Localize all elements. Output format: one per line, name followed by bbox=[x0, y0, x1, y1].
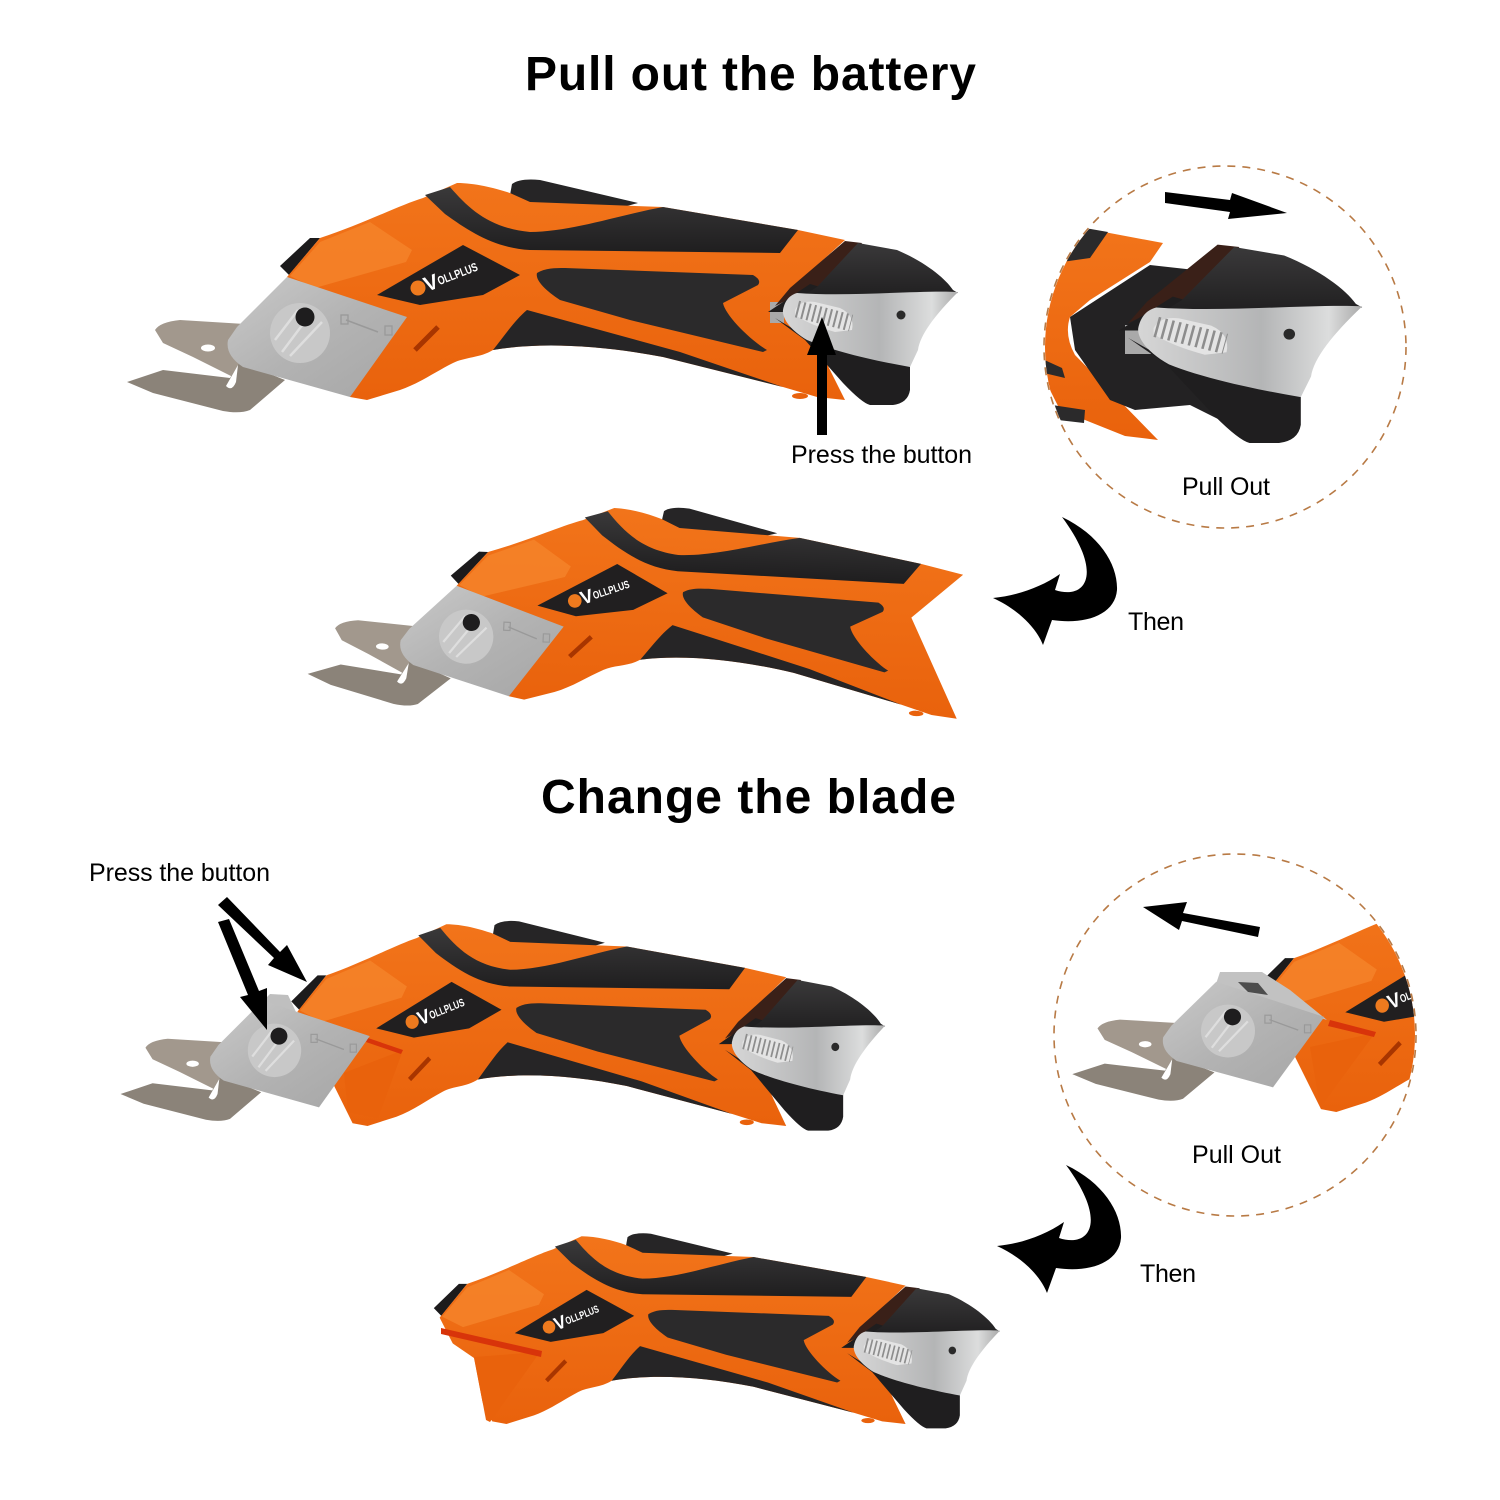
front cutout bbox=[430, 1332, 488, 1432]
inset tool close-up: OLLPLUS bbox=[1398, 980, 1438, 1006]
tool body bbox=[434, 1233, 906, 1424]
label: pull out: Pull Out bbox=[1192, 1141, 1281, 1169]
opened front bbox=[474, 1352, 540, 1422]
title: pull out the battery: Pull out the battery bbox=[525, 48, 976, 101]
dashed circle bbox=[1044, 166, 1406, 528]
arrow: pull right bbox=[1165, 192, 1287, 219]
metal back bbox=[263, 994, 296, 1012]
arrow: pull left bbox=[1143, 902, 1260, 937]
battery bbox=[841, 1286, 1000, 1428]
label: then: Then bbox=[1140, 1260, 1196, 1288]
curved arrow: then bbox=[993, 517, 1117, 645]
label: then: Then bbox=[1128, 608, 1184, 636]
battery bbox=[768, 241, 958, 405]
opened front bbox=[344, 1050, 403, 1118]
logo: V bbox=[551, 1311, 569, 1334]
logo: V bbox=[421, 270, 442, 297]
tool: battery removed bbox=[306, 492, 966, 730]
battery bbox=[719, 978, 885, 1131]
tool body bbox=[445, 498, 966, 719]
tool: complete scissors with battery bbox=[127, 180, 958, 412]
label: pull out: Pull Out bbox=[1182, 473, 1270, 501]
red channel bbox=[441, 1328, 542, 1357]
logo: V bbox=[578, 586, 597, 610]
logo bbox=[407, 255, 481, 302]
inset tool close-up bbox=[1030, 228, 1362, 443]
tool body bbox=[291, 921, 786, 1126]
metal nose bbox=[228, 277, 407, 397]
title: change the blade: Change the blade bbox=[541, 771, 956, 824]
arrow: to screw bbox=[218, 919, 267, 1030]
inset tool close-up: V bbox=[1384, 988, 1404, 1014]
arrow: to top button bbox=[218, 897, 307, 982]
arrow: up to button bbox=[807, 317, 836, 435]
label: press the button: Press the button bbox=[89, 859, 270, 887]
logo bbox=[403, 992, 468, 1035]
logo bbox=[540, 1298, 602, 1339]
logo: V bbox=[415, 1005, 434, 1030]
logo: OLLPLUS bbox=[435, 260, 480, 288]
tool: nose released bbox=[121, 921, 885, 1131]
label: press the button: Press the button bbox=[791, 441, 972, 469]
inset tool close-up bbox=[1072, 924, 1415, 1112]
blades bbox=[306, 618, 453, 707]
metal nose bbox=[398, 583, 565, 699]
tool: blade removed bbox=[430, 1233, 1000, 1432]
blades bbox=[127, 320, 285, 412]
logo: OLLPLUS bbox=[564, 1304, 601, 1327]
curved arrow: then bbox=[997, 1165, 1121, 1293]
dashed circle bbox=[1054, 854, 1416, 1216]
tool body bbox=[280, 180, 845, 400]
metal nose bbox=[210, 1001, 370, 1107]
gray latch tab bbox=[770, 302, 784, 323]
logo bbox=[565, 574, 632, 614]
logo: OLLPLUS bbox=[428, 997, 466, 1022]
inset circle: battery pulled out bbox=[1030, 166, 1406, 528]
red channel bbox=[366, 1038, 403, 1054]
inset circle: blade pulled out bbox=[1053, 853, 1417, 1217]
logo: OLLPLUS bbox=[591, 579, 631, 602]
blades bbox=[121, 1039, 261, 1121]
